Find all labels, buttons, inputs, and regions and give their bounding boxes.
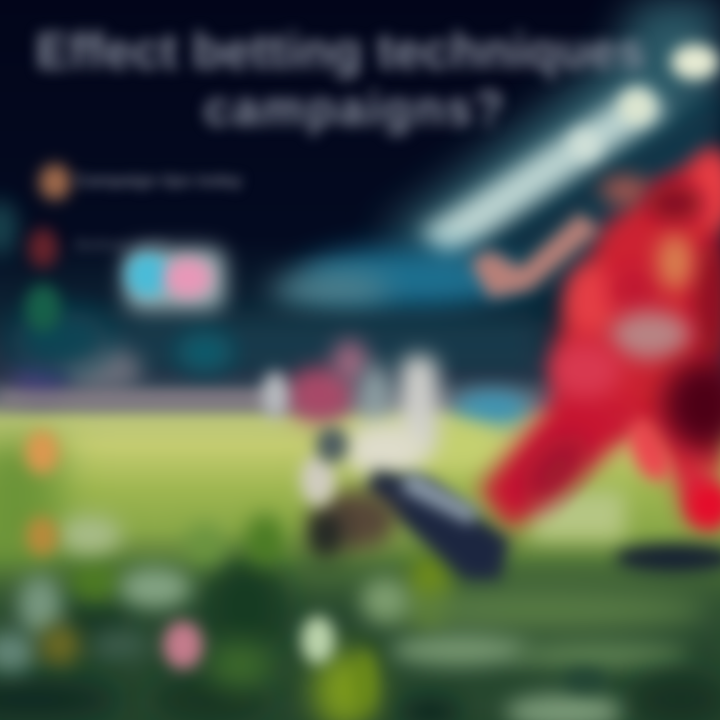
chart tile bbox=[125, 248, 225, 310]
legend colour markers bbox=[25, 164, 71, 556]
title: Effect betting techniques bbox=[36, 23, 646, 79]
title: campaigns? bbox=[204, 83, 506, 136]
stands band bbox=[0, 200, 540, 426]
stadium light beam and floodlights bbox=[380, 0, 720, 300]
legend labels: Betting odds bbox=[75, 235, 170, 254]
kicking boot bbox=[300, 427, 720, 580]
legend labels bbox=[73, 170, 246, 254]
red player in foreground bbox=[470, 150, 720, 530]
background players bbox=[262, 340, 438, 478]
legend labels: Campaign tips today bbox=[75, 171, 242, 190]
foliage foreground bbox=[0, 514, 720, 720]
pitch bbox=[0, 423, 625, 570]
title bbox=[30, 23, 650, 144]
